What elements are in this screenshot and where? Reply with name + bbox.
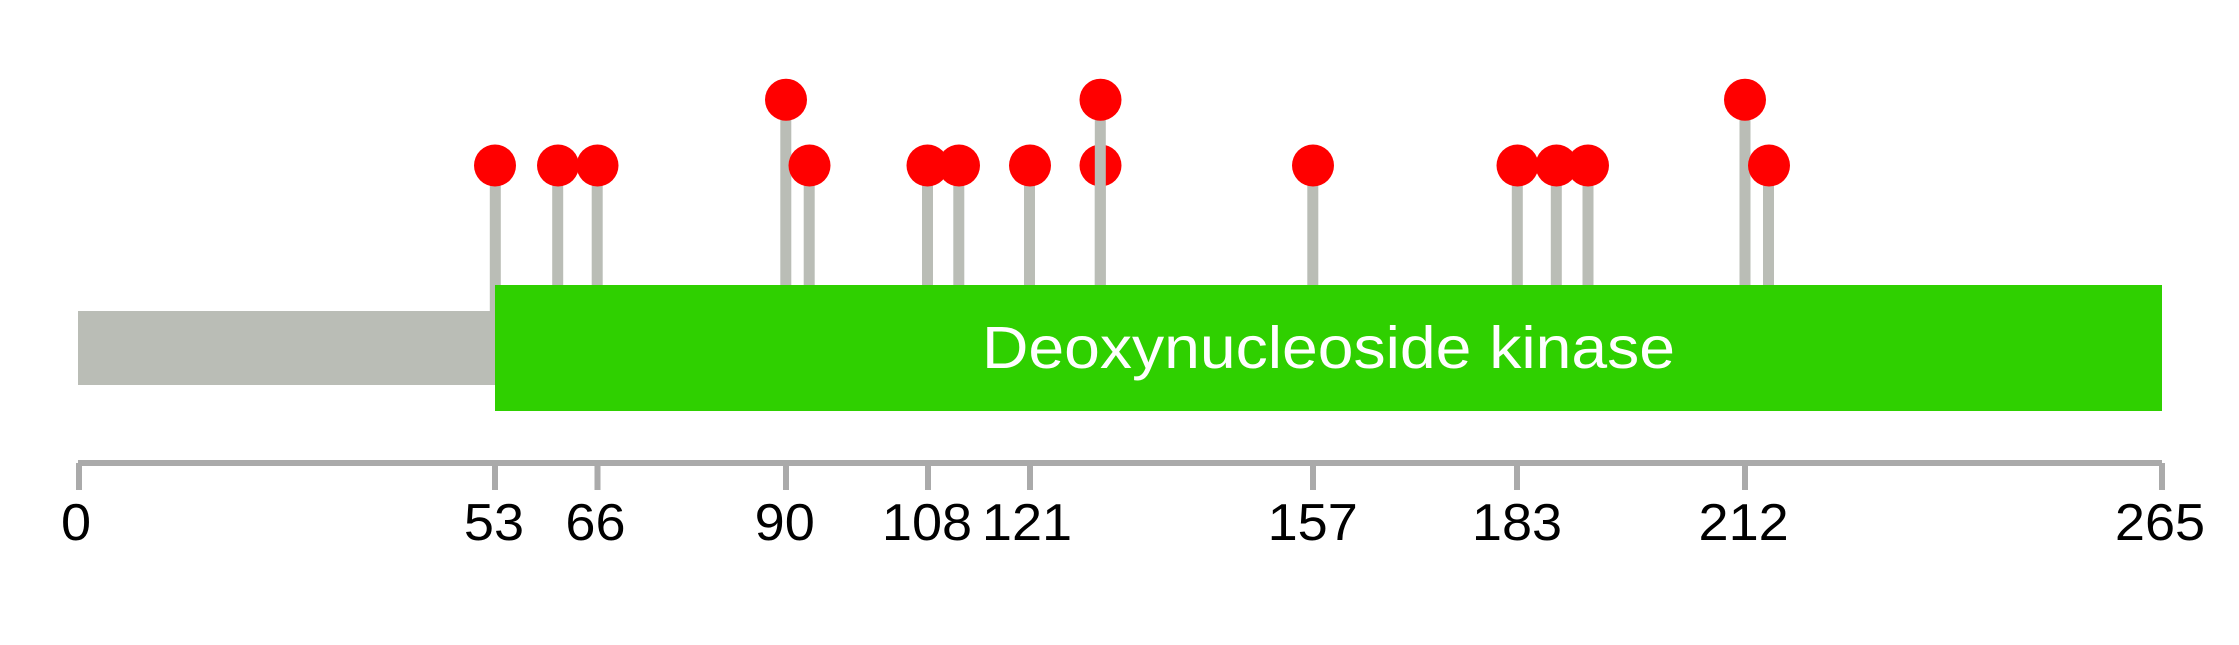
lollipop: position 66 — [576, 144, 618, 287]
domain label: Deoxynucleoside kinase — [982, 315, 1675, 381]
lollipop: position 192 — [1567, 144, 1609, 287]
lollipop: position 130 lower — [1080, 144, 1122, 287]
lollipop: position 108 — [906, 144, 948, 287]
lollipop: position 90 — [765, 79, 807, 287]
lollipop: position 215 — [1748, 144, 1790, 287]
lollipop: position 188 — [1536, 144, 1578, 287]
lollipop: position 121 — [1009, 144, 1051, 287]
lollipop markers — [474, 79, 1790, 311]
axis labels — [61, 494, 2205, 552]
protein backbone bar — [78, 311, 498, 385]
axis labels: 66 — [565, 494, 626, 552]
lollipop: position 157 — [1292, 144, 1334, 287]
position axis — [76, 460, 2165, 490]
axis labels: 90 — [755, 494, 815, 552]
lollipop: position 130 upper — [1080, 79, 1122, 287]
lollipop: position 112 — [938, 144, 980, 287]
axis labels: 53 — [464, 494, 524, 552]
axis labels: 108 — [882, 494, 972, 552]
axis labels: 0 — [61, 494, 91, 552]
lollipop: position 53 — [474, 144, 516, 311]
lollipop: position 183 — [1496, 144, 1538, 287]
lollipop: position 61 — [537, 144, 579, 287]
axis labels: 183 — [1472, 494, 1562, 552]
axis labels: 121 — [982, 494, 1072, 552]
axis labels: 265 — [2115, 494, 2205, 552]
lollipop: position 212 — [1724, 79, 1766, 287]
lollipop: position 93 — [788, 144, 830, 287]
axis labels: 212 — [1698, 494, 1789, 552]
domain: Deoxynucleoside kinase — [495, 285, 2162, 411]
axis labels: 157 — [1268, 494, 1358, 552]
